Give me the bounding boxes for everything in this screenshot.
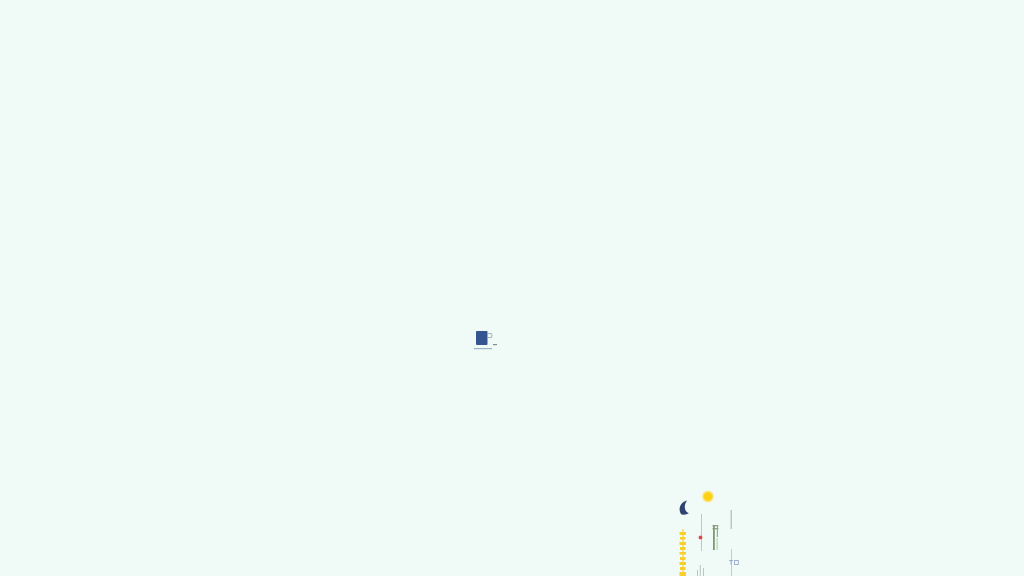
- icon: crescent moon: [680, 500, 689, 515]
- green vertical marks column: [712, 525, 718, 550]
- red vertical line with marker: [699, 514, 702, 551]
- grey small marks: [697, 565, 704, 576]
- icon: mug: [476, 331, 492, 345]
- mug caption marks: [474, 344, 497, 349]
- grey-blue vertical mark: [730, 510, 732, 529]
- blue vertical line: [730, 549, 733, 576]
- icon: sun: [703, 491, 713, 502]
- yellow vertical marks column: [680, 529, 686, 576]
- blue small marks: [729, 560, 738, 564]
